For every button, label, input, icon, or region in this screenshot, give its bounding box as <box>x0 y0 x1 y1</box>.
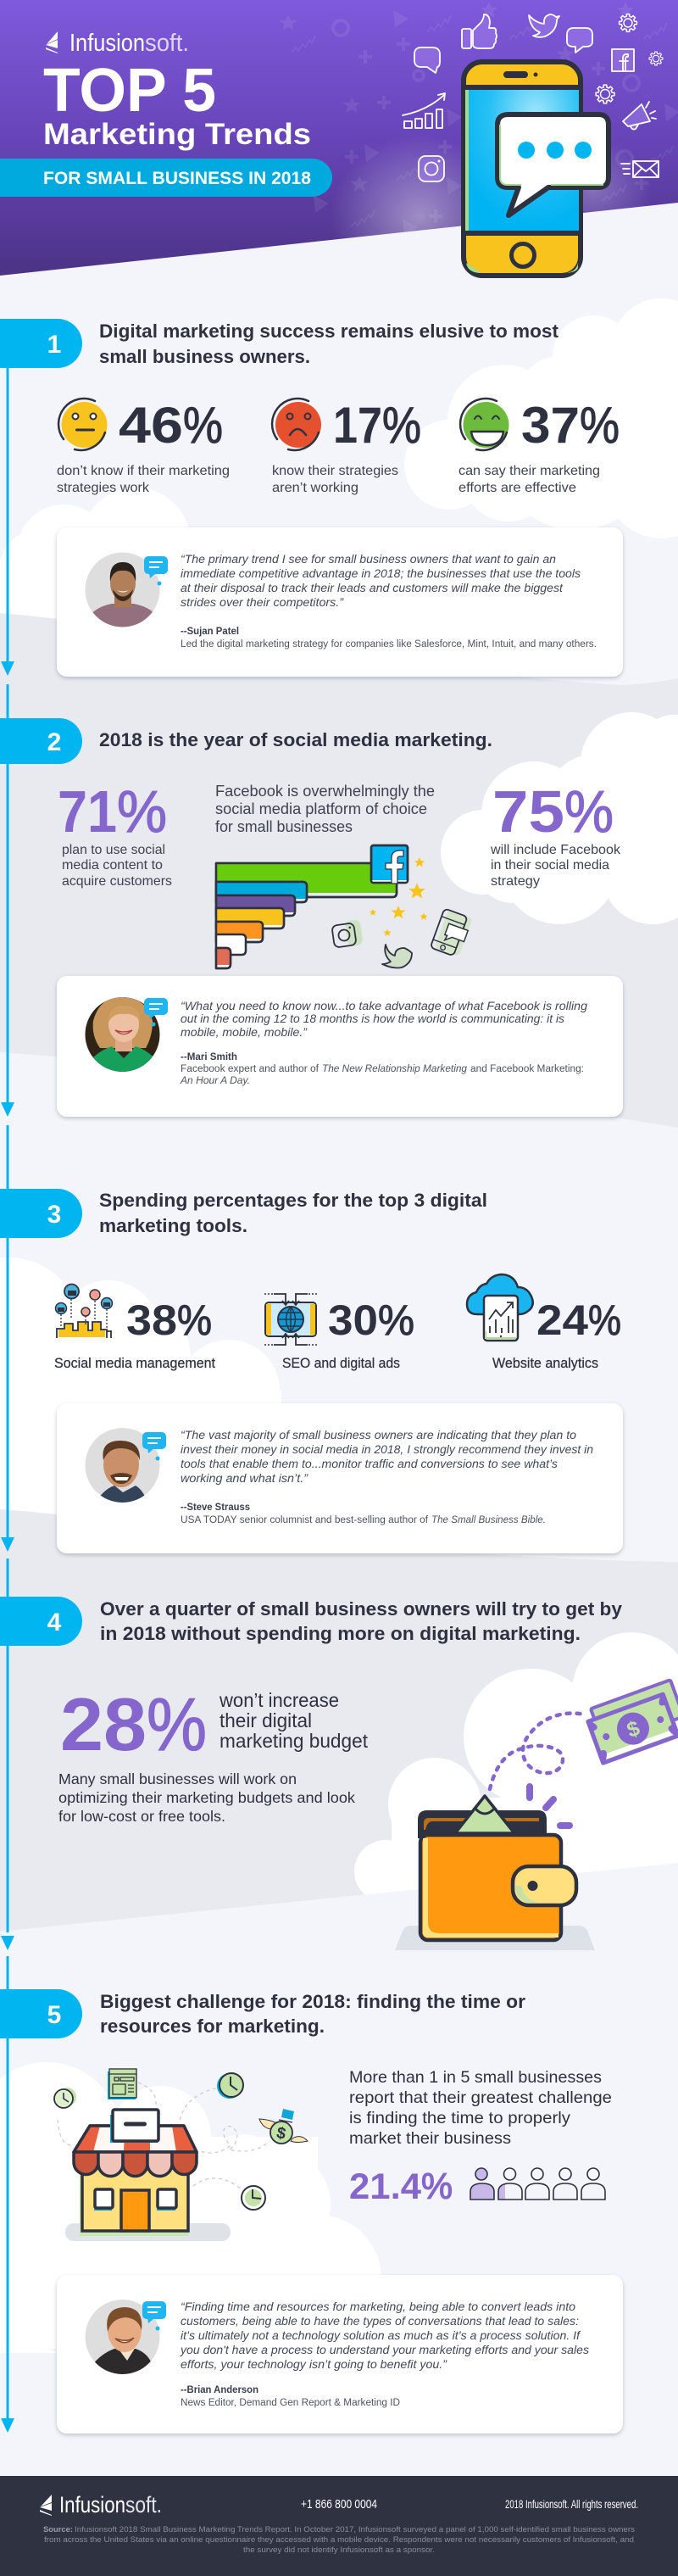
stat: 46%: strategies work <box>57 481 150 495</box>
stat: 30%: SEO and digital ads <box>282 1355 400 1371</box>
icon: facebook <box>612 49 634 71</box>
subtitle banner: FOR SMALL BUSINESS IN 2018 <box>43 169 311 188</box>
icon: twitter <box>529 14 559 37</box>
stat: 75%: 75 <box>492 778 564 845</box>
paragraph <box>58 1770 355 1825</box>
footer logo: Infusion <box>59 2492 125 2517</box>
banknotes <box>584 1680 678 1763</box>
storefront illustration <box>54 2068 308 2241</box>
stat: 28%: 28 <box>60 1682 147 1766</box>
stat: 17% <box>272 397 421 495</box>
photo: Sujan Patel <box>85 551 161 627</box>
panel: section 2 <box>0 718 623 1117</box>
chart text: Facebook is overwhelmingly the <box>215 783 435 800</box>
bar chart: social platforms <box>216 845 408 968</box>
stat: 46% <box>57 397 230 495</box>
stat: 71%: % <box>117 778 167 845</box>
subtitle banner <box>0 159 332 197</box>
clock top <box>217 2073 243 2099</box>
number tab 1 <box>0 319 82 368</box>
heading 5 <box>100 1991 525 2037</box>
purple header background <box>0 0 678 297</box>
icon: twitter small <box>382 945 412 968</box>
number tab 4 <box>0 1597 82 1646</box>
source note: Infusionsoft 2018 Small Business Marketing Trends Report. In October 2017, Infusionsoft surveyed a panel of 1,000 self-identified small business owners <box>75 2525 635 2534</box>
quote text: tools that enable them to...monitor traffic and conversions to see what’s <box>181 1458 558 1470</box>
logo: Infusion <box>69 30 145 57</box>
stat: 71%: plan to use social <box>62 843 165 857</box>
panel: section 5 <box>0 1989 623 2434</box>
panel: section 3 <box>0 1189 623 1553</box>
paragraph: Many small businesses will work on <box>58 1770 297 1787</box>
quote text: you don't have a process to understand your marketing efforts and your sales <box>180 2344 589 2356</box>
icon: megaphone <box>623 102 656 130</box>
text: challenge: More than 1 in 5 small businesses <box>349 2068 602 2087</box>
heading 1: small business owners. <box>99 346 310 367</box>
quote text: --Brian Anderson <box>181 2385 258 2395</box>
quote text <box>181 553 597 650</box>
quote card 1 <box>57 527 623 677</box>
stat: 24% <box>467 1274 621 1371</box>
stat: 75% <box>490 778 621 889</box>
stat: 46%: 46 <box>119 397 183 454</box>
number tab 5: 5 <box>47 2001 61 2029</box>
icon: cloud analytics <box>467 1274 533 1341</box>
quote text: working and what isn’t.” <box>181 1472 308 1485</box>
source note: Source: <box>43 2525 73 2534</box>
quote text: USA TODAY senior columnist and best-selling author of <box>181 1515 429 1525</box>
paragraph: optimizing their marketing budgets and look <box>58 1789 355 1806</box>
stat: 46%: don’t know if their marketing <box>57 464 230 478</box>
money trail <box>490 1714 585 1789</box>
icon: instagram <box>419 156 444 181</box>
heading 1: Digital marketing success remains elusive to most <box>99 321 559 342</box>
stat: 28% <box>60 1682 369 1766</box>
quote text: “The vast majority of small business owners are indicating that they plan to <box>181 1429 577 1441</box>
icon: gear small <box>649 52 663 65</box>
quote text: “Finding time and resources for marketing, being able to convert leads into <box>181 2300 576 2313</box>
number tab 1: 1 <box>47 331 61 359</box>
logo: soft. <box>145 30 189 57</box>
stat: 75%: in their social media <box>491 858 609 873</box>
stat: 28%: marketing budget <box>220 1730 369 1752</box>
quote text: “The primary trend I see for small business owners that want to gain an <box>181 553 556 566</box>
stat: 24%: % <box>588 1296 621 1344</box>
quote icon <box>144 556 168 585</box>
stat: 37%: % <box>580 397 620 454</box>
quote text: customers, being able to have the types of conversations that lead to sales: <box>181 2315 579 2328</box>
quote text <box>180 1000 588 1086</box>
icon: growth chart <box>403 93 445 128</box>
panel: section 4 <box>0 1597 678 1950</box>
number tab 4: 4 <box>47 1609 62 1636</box>
stat: 75%: % <box>564 778 614 845</box>
quote text: The Small Business Bible. <box>431 1515 546 1525</box>
stat: 24%: Website analytics <box>492 1355 598 1371</box>
stat: 46%: % <box>183 397 223 454</box>
stat: 17%: % <box>382 397 421 454</box>
icon: mail <box>621 161 659 177</box>
stat: 37%: can say their marketing <box>458 464 600 478</box>
header banner <box>0 0 678 297</box>
stat: 37% <box>458 397 620 495</box>
heading 5: resources for marketing. <box>100 2016 325 2037</box>
number tab 2: 2 <box>47 728 61 756</box>
number tab 3 <box>0 1189 82 1238</box>
source note: the survey did not identify Infusionsoft as a sponsor. <box>243 2545 435 2555</box>
number tab 3: 3 <box>47 1201 61 1229</box>
text: challenge <box>349 2068 612 2148</box>
text: challenge: market their business <box>349 2129 511 2148</box>
heading 4: Over a quarter of small business owners will try to get by <box>100 1598 623 1620</box>
chart text: social media platform of choice <box>215 800 427 817</box>
photo: Mari Smith <box>85 996 161 1073</box>
stat: 75%: strategy <box>491 874 540 889</box>
icon: speech bubble left <box>414 47 440 73</box>
footer <box>0 2476 678 2576</box>
icon: globe device <box>264 1294 317 1345</box>
icon: instagram small <box>331 919 364 949</box>
icon: thumbs up <box>462 14 497 48</box>
number tab 5 <box>0 1989 82 2038</box>
heading 3: marketing tools. <box>99 1215 247 1236</box>
title <box>43 57 311 151</box>
quote icon <box>142 1432 166 1460</box>
quote text: strides over their competitors.” <box>181 596 344 609</box>
quote text: immediate competitive advantage in 2018; the businesses that use the tools <box>181 567 581 580</box>
stat: 38%: % <box>177 1296 212 1344</box>
awning <box>74 2126 197 2176</box>
source note: from across the United States via an online questionnaire they accessed with a mobile device. Respondents were not necessarily customers of Infusionsoft, and <box>44 2535 634 2545</box>
stars <box>370 857 428 936</box>
stat: 37%: efforts are effective <box>458 481 576 495</box>
chart text: for small businesses <box>215 818 353 835</box>
banknote in wallet <box>455 1796 514 1833</box>
quote card 3 <box>57 1403 623 1553</box>
quote text: --Mari Smith <box>181 1052 237 1062</box>
quote text <box>180 2300 589 2408</box>
flying money bag: $ <box>275 2124 287 2144</box>
text: challenge: report that their greatest challenge <box>349 2088 612 2107</box>
quote text: The New Relationship Marketing <box>322 1064 468 1074</box>
wallet illustration <box>395 1680 678 1950</box>
stat: 37%: 37 <box>521 397 580 454</box>
heading 4 <box>100 1598 623 1644</box>
heading 4: in 2018 without spending more on digital marketing. <box>100 1623 581 1644</box>
photo: Steve Strauss <box>85 1425 161 1505</box>
stat: 28%: % <box>147 1682 207 1766</box>
stat: 71%: 71 <box>58 778 117 845</box>
footer logo: soft. <box>125 2492 162 2517</box>
clock left <box>54 2088 76 2108</box>
clock bottom <box>242 2186 265 2210</box>
quote text: An Hour A Day. <box>180 1076 250 1086</box>
stat: 21.4% <box>349 2166 453 2207</box>
quote card 2 <box>57 976 623 1117</box>
quote text: Facebook expert and author of <box>181 1064 320 1074</box>
panel: section 1 <box>0 319 623 677</box>
banknotes: $ <box>624 1716 643 1742</box>
stat: 30% <box>264 1294 414 1371</box>
heading 5: Biggest challenge for 2018: finding the time or <box>100 1991 525 2012</box>
quote icon <box>144 998 168 1026</box>
quote text: it’s ultimately not a technology solution as much as it’s a process solution. If <box>181 2329 581 2342</box>
quote text: invest their money in social media in 2018, I strongly recommend they invest in <box>181 1443 593 1456</box>
quote text: and Facebook Marketing: <box>470 1064 584 1074</box>
quote text: --Sujan Patel <box>181 627 239 637</box>
quote text: efforts, your technology isn’t going to benefit you.” <box>181 2358 447 2371</box>
stat: 71%: media content to <box>62 858 163 873</box>
icon: speech bubble right <box>567 28 592 53</box>
footer logo <box>40 2492 162 2517</box>
heading 3 <box>99 1190 487 1236</box>
heading 2: 2018 is the year of social media marketing. <box>99 729 492 750</box>
quote icon <box>142 2301 166 2330</box>
quote card 4 <box>57 2275 623 2434</box>
quote text: Led the digital marketing strategy for companies like Salesforce, Mint, Intuit, and many others. <box>181 639 597 650</box>
stat: 17%: know their strategies <box>272 464 398 478</box>
timeline arrows <box>1 368 14 2433</box>
source note <box>43 2525 635 2555</box>
stat: 38%: 38 <box>126 1296 177 1344</box>
pictogram: people <box>470 2168 605 2200</box>
title: TOP 5 <box>43 57 216 125</box>
quote text: “What you need to know now...to take advantage of what Facebook is rolling <box>181 1000 588 1012</box>
logo <box>46 30 189 57</box>
stat: 75%: will include Facebook <box>490 843 621 857</box>
stat: 17%: aren’t working <box>272 481 358 495</box>
icon: gear mid <box>596 85 614 103</box>
stat: 21.4%: 21.4 <box>349 2166 421 2207</box>
heading 3: Spending percentages for the top 3 digital <box>99 1190 487 1211</box>
stat: 21.4%: % <box>421 2166 453 2207</box>
phone number: +1 866 800 0004 <box>301 2497 377 2512</box>
photo: Brian Anderson <box>85 2298 161 2374</box>
stat: 28%: won’t increase <box>219 1689 339 1711</box>
quote text: mobile, mobile, mobile.” <box>181 1026 308 1039</box>
stat: 30%: % <box>378 1296 414 1344</box>
chat bubble <box>497 114 609 215</box>
paragraph: for low-cost or free tools. <box>58 1808 225 1825</box>
stat: 38% <box>54 1284 215 1371</box>
chart text <box>215 783 435 835</box>
number tab 2 <box>0 718 82 764</box>
stat: 71% <box>58 778 172 889</box>
stat: 24%: 24 <box>536 1296 588 1344</box>
phone illustration <box>462 62 609 276</box>
icon: tilted phone <box>431 908 472 957</box>
quote text: out in the coming 12 to 18 months is how the world is communicating: it is <box>181 1012 564 1025</box>
quote text: --Steve Strauss <box>181 1503 250 1513</box>
stat: 30%: 30 <box>328 1296 378 1344</box>
stat: 38%: Social media management <box>54 1355 215 1371</box>
text: challenge: is finding the time to properly <box>349 2109 570 2127</box>
icon: facebook square <box>371 845 408 884</box>
flying money bag <box>259 2109 308 2144</box>
quote text: at their disposal to track their leads and customers will make the biggest <box>181 582 564 594</box>
title: Marketing Trends <box>43 118 311 151</box>
web page icon <box>108 2068 137 2099</box>
quote text <box>181 1429 593 1525</box>
stat: 28%: their digital <box>220 1709 312 1731</box>
shop sign <box>110 2110 158 2143</box>
icon: social likes skyline <box>56 1284 112 1338</box>
quote text: News Editor, Demand Gen Report & Marketing ID <box>181 2398 400 2408</box>
heading 1 <box>99 321 559 367</box>
icon: gear top <box>620 14 636 31</box>
stat: 71%: acquire customers <box>62 874 172 889</box>
stat: 17%: 17 <box>333 397 382 454</box>
